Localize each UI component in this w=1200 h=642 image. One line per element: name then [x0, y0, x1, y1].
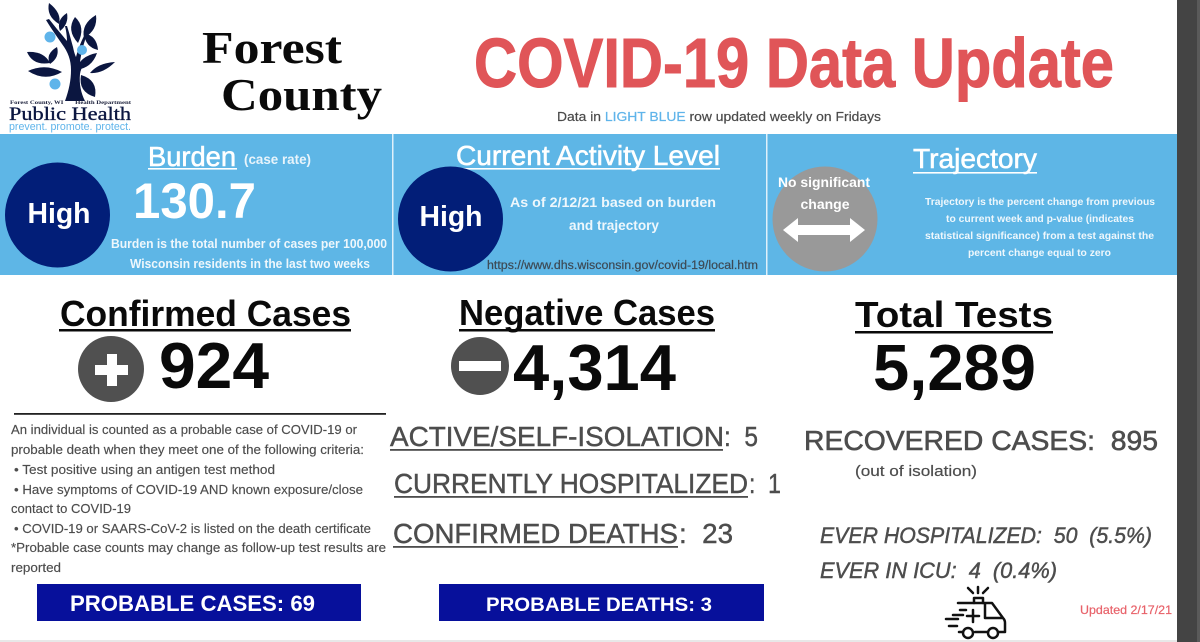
- callout: probable cases: PROBABLE CASES: 69: [70, 591, 315, 616]
- text: probable case definition: *Probable case counts may change as follow-up test results are: [11, 541, 386, 555]
- heading: Current Activity Level: Current Activity Level: [456, 140, 720, 171]
- icon: ambulance: [946, 587, 1005, 638]
- text: activity date: and trajectory: [569, 217, 659, 233]
- badge: no significant change: [772, 166, 878, 272]
- badge: High: [5, 162, 110, 268]
- stat: recovered cases: RECOVERED CASES: 895: [804, 425, 1158, 456]
- text: burden description: Wisconsin residents in the last two weeks: [130, 257, 370, 271]
- stat: confirmed deaths: : 23: [679, 518, 733, 549]
- subtitle: Data in LIGHT BLUE row updated weekly on Fridays: [557, 109, 882, 124]
- callout: probable cases: [37, 584, 361, 621]
- panel: confirmed cases: [59, 293, 351, 402]
- heading: Total Tests: Total Tests: [855, 294, 1053, 335]
- panel: total tests: [855, 294, 1053, 404]
- logo: Forest County Public Health: Public Health: [9, 104, 132, 125]
- text: probable case definition: An individual is counted as a probable case of COVID-19 or: [11, 423, 357, 437]
- text: probable case definition: contact to COVID-19: [11, 502, 131, 516]
- text: activity date: As of 2/12/21 based on burden: [510, 194, 716, 210]
- text: burden description: [111, 237, 387, 271]
- stat: currently hospitalized: : 1: [749, 468, 781, 499]
- text: probable case definition: reported: [11, 561, 61, 575]
- icon: tree: [27, 3, 115, 101]
- logo: Forest County Public Health: [9, 3, 132, 133]
- text: activity date: [510, 194, 716, 233]
- badge: High: [398, 166, 503, 272]
- heading: Forest County: Forest: [202, 22, 343, 73]
- text: trajectory description: statistical significance) from a test against the: [925, 230, 1154, 242]
- heading: Negative Cases: Negative Cases: [459, 292, 715, 333]
- label: case rate: (case rate): [244, 152, 311, 167]
- icon: minus: [451, 337, 509, 395]
- stat: ever hospitalized: EVER HOSPITALIZED: 50 (5.5%): [820, 523, 1152, 548]
- panel: negative cases: [451, 292, 715, 404]
- icon: blue dots: [44, 32, 87, 90]
- value: 924: 924: [159, 329, 269, 402]
- icon: plus: [78, 336, 144, 402]
- stat: ever in icu: EVER IN ICU: 4 (0.4%): [820, 558, 1057, 583]
- badge: High: High: [420, 201, 482, 233]
- heading: Trajectory: Trajectory: [913, 143, 1037, 174]
- heading: Confirmed Cases: Confirmed Cases: [60, 293, 351, 334]
- badge: no significant change: change: [800, 197, 850, 212]
- badge: High: High: [28, 198, 90, 230]
- text: trajectory description: Trajectory is the percent change from previous: [925, 196, 1155, 208]
- text: burden description: Burden is the total number of cases per 100,000: [111, 237, 387, 251]
- callout: probable deaths: [439, 584, 764, 621]
- heading: Forest County: [202, 22, 382, 120]
- logo: Forest County Public Health: Forest County, WI Health Department: [10, 100, 131, 106]
- panel: current activity level: [398, 140, 758, 272]
- text: probable case definition: probable death when they meet one of the following criteria:: [11, 443, 364, 457]
- text: probable case definition: • Test positive using an antigen test method: [14, 463, 275, 477]
- panel: trajectory: [772, 143, 1155, 272]
- value: 130.7: 130.7: [133, 173, 256, 229]
- value: 5,289: 5,289: [873, 331, 1036, 404]
- link: source url: https://www.dhs.wisconsin.gov/covid-19/local.htm: [487, 260, 758, 272]
- note: updated date: Updated 2/17/21: [1080, 603, 1172, 617]
- heading: Burden: Burden: [148, 141, 236, 172]
- text: trajectory description: percent change equal to zero: [968, 247, 1111, 259]
- panel: blue metrics band: [0, 134, 1177, 275]
- badge: no significant change: No significant: [778, 175, 871, 190]
- arrow: double headed: [783, 218, 865, 242]
- stat: active self-isolation: ACTIVE/SELF-ISOLATION: [390, 421, 724, 452]
- logo: Forest County Public Health: prevent. promote. protect.: [9, 121, 131, 133]
- callout: probable deaths: PROBABLE DEATHS: 3: [486, 594, 712, 616]
- text: probable case definition: • Have symptoms of COVID-19 AND known exposure/close: [14, 483, 363, 497]
- heading: Forest County: County: [221, 69, 382, 120]
- panel: burden: [5, 141, 387, 271]
- value: 4,314: 4,314: [513, 331, 676, 404]
- text: probable case definition: • COVID-19 or SAARS-CoV-2 is listed on the death certificate: [14, 522, 371, 536]
- stat: confirmed deaths: CONFIRMED DEATHS: [393, 518, 678, 549]
- stat: currently hospitalized: CURRENTLY HOSPITALIZED: [394, 468, 748, 499]
- note: out of isolation: (out of isolation): [855, 463, 977, 480]
- text: trajectory description: [925, 196, 1155, 259]
- stat: active self-isolation: : 5: [724, 421, 758, 452]
- text: trajectory description: to current week and p-value (indicates: [946, 213, 1134, 225]
- text: probable case definition: [11, 423, 386, 575]
